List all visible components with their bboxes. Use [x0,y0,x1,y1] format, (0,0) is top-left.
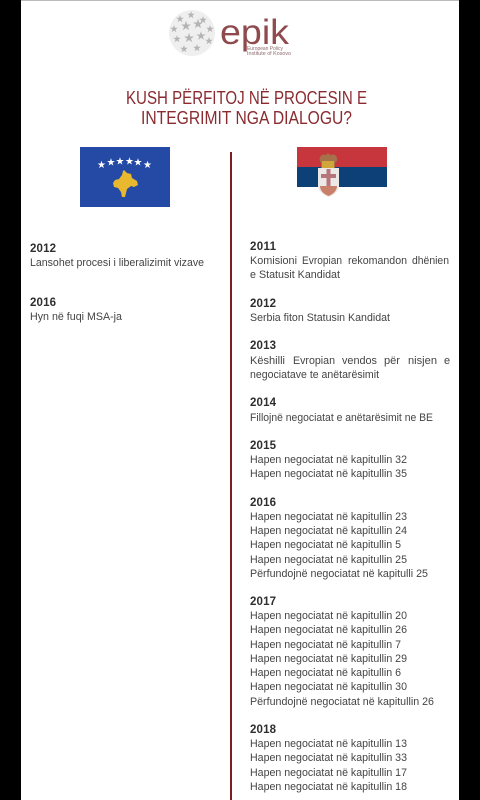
entry: 2016: Hapen negociatat në kapitullin 25 [250,554,407,566]
icon: Kosovo flag: ★ [97,160,106,171]
entry: 2016 [30,297,123,323]
entry: 2011: e Statusit Kandidat [250,269,340,281]
entry: 2018: Hapen negociatat në kapitullin 33 [250,752,407,764]
entry: 2015: Hapen negociatat në kapitullin 35 [250,468,407,480]
entry: 2013: 2013 [250,340,276,352]
entry: 2012 [250,298,390,324]
icon: star globe [169,10,215,56]
entry: 2016: Hapen negociatat në kapitullin 23 [250,511,407,523]
entry: 2017 [250,596,434,708]
entry: 2018: 2018 [250,724,277,736]
entry: 2017: Hapen negociatat në kapitullin 30 [250,681,407,693]
panel: Kosovo timeline [30,243,204,323]
entry: 2016 [250,497,428,580]
entry: 2012: 2012 [30,243,56,255]
entry: 2014 [250,397,433,424]
entry: 2017: Hapen negociatat në kapitullin 20 [250,610,407,622]
title: INTEGRIMIT NGA DIALOGU? [141,107,352,128]
panel: Serbia timeline [250,241,450,793]
logo tagline: Institute of Kosovo [247,51,291,57]
entry: 2017: Hapen negociatat në kapitullin 29 [250,653,407,665]
entry: 2013: negociatave te anëtarësimit [250,369,379,381]
entry: 2016: 2016 [250,497,276,509]
icon: Kosovo flag: ★ [107,158,116,168]
entry: 2016: Hapen negociatat në kapitullin 24 [250,525,407,537]
entry: 2015: 2015 [250,440,277,452]
entry: 2018: Hapen negociatat në kapitullin 17 [250,767,407,779]
entry: 2011: 2011 [250,241,277,253]
entry: 2017: 2017 [250,596,276,608]
title: KUSH PËRFITOJ NË PROCESIN E [126,87,367,108]
entry: 2016: Hapen negociatat në kapitullin 5 [250,539,401,551]
entry: 2013: Këshilli [250,355,285,367]
entry: 2011: Evropian [302,255,342,267]
entry: 2016: 2016 [30,297,56,309]
entry: 2013: nisjen [408,355,437,367]
icon: Kosovo flag: ★ [134,158,143,168]
entry: 2018 [250,724,407,793]
logo tagline: European Policy [247,46,283,52]
entry: 2011: rekomandon [348,255,407,267]
entry: 2012: Lansohet procesi i liberalizimit vizave [30,257,204,269]
timeline divider line [230,152,232,800]
icon: Kosovo flag [80,147,170,207]
entry: 2014: 2014 [250,397,277,409]
entry: 2013: për [384,355,400,367]
entry: 2013 [250,340,450,381]
entry: 2011 [250,241,449,281]
entry: 2018: Hapen negociatat në kapitullin 13 [250,738,407,750]
entry: 2017: Hapen negociatat në kapitullin 6 [250,667,401,679]
entry: 2011: Komisioni [250,255,297,267]
entry: 2015 [250,440,407,480]
entry: 2016: Përfundojnë negociatat në kapitulli 25 [250,568,428,580]
entry: 2017: Hapen negociatat në kapitullin 7 [250,639,401,651]
logo tagline [247,46,291,57]
coat of arms [318,153,339,197]
logo wordmark: epik [220,13,290,52]
entry: 2012: Serbia fiton Statusin Kandidat [250,312,390,324]
entry: 2013: vendos [342,355,377,367]
entry: 2013: Evropian [293,355,335,367]
entry: 2016: Hyn në fuqi MSA-ja [30,311,123,323]
entry: 2018: Hapen negociatat në kapitullin 18 [250,781,407,793]
entry: 2012 [30,243,204,269]
entry: 2012: 2012 [250,298,276,310]
title [126,87,367,128]
entry: 2011: dhënien [412,255,449,267]
icon: Serbia flag [297,147,387,197]
logo: epik [169,10,291,57]
entry: 2017: Përfundojnë negociatat në kapitullin 26 [250,696,434,708]
entry: 2015: Hapen negociatat në kapitullin 32 [250,454,407,466]
entry: 2014: Fillojnë negociatat e anëtarësimit ne BE [250,412,433,424]
icon: Kosovo flag: ★ [143,160,152,171]
icon: Kosovo flag: ★ [116,156,125,168]
entry: 2017: Hapen negociatat në kapitullin 26 [250,624,407,636]
entry: 2013: e [444,355,450,367]
icon: Kosovo flag: ★ [125,156,134,168]
